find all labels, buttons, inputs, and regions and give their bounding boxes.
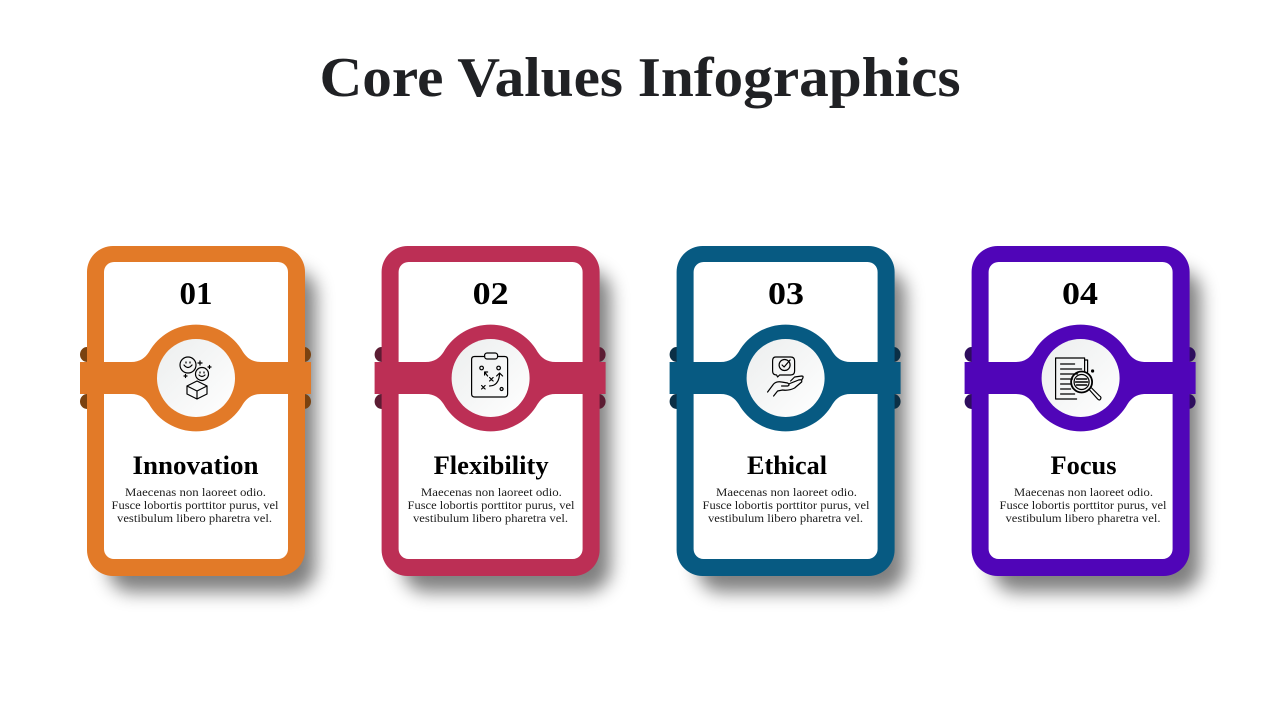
band tabs (80, 347, 311, 409)
band tabs (965, 347, 1196, 409)
description (1000, 487, 1166, 525)
card interior (985, 258, 1177, 563)
description: vestibulum libero pharetra vel. (413, 513, 568, 525)
medallion disc (747, 339, 825, 417)
band tabs (670, 347, 901, 409)
card shadow (108, 270, 316, 592)
heading: Ethical (747, 451, 827, 480)
number: 01 (180, 275, 212, 311)
icon: strategy clipboard (472, 353, 508, 397)
card interior (690, 258, 882, 563)
number: 02 (473, 275, 509, 311)
description: Fusce lobortis porttitor purus, vel (408, 500, 574, 512)
panel: Ethical (670, 246, 906, 592)
icon: hand holding check bubble (768, 357, 803, 396)
description: Maecenas non laoreet odio. (421, 487, 562, 499)
description: Maecenas non laoreet odio. (1014, 487, 1153, 499)
medallion disc (452, 339, 530, 417)
card shadow (698, 270, 906, 592)
card interior (100, 258, 292, 563)
description: Fusce lobortis porttitor purus, vel (999, 500, 1166, 512)
description: vestibulum libero pharetra vel. (1005, 513, 1161, 525)
panel: Innovation (80, 246, 316, 592)
description: vestibulum libero pharetra vel. (117, 513, 272, 525)
heading: Flexibility (434, 451, 549, 480)
number: 03 (768, 275, 804, 311)
number: 04 (1062, 275, 1098, 311)
card interior (395, 258, 587, 563)
band with medallion ring (965, 325, 1196, 431)
card frame (382, 246, 600, 576)
panel: Focus (965, 246, 1201, 592)
band with medallion ring (670, 325, 901, 431)
description: vestibulum libero pharetra vel. (708, 513, 863, 525)
description: Maecenas non laoreet odio. (716, 487, 857, 499)
band with medallion ring (80, 325, 311, 431)
description: Maecenas non laoreet odio. (125, 487, 266, 499)
description (408, 487, 574, 525)
panel: Flexibility (375, 246, 611, 592)
description: Fusce lobortis porttitor purus, vel (112, 500, 278, 512)
card frame (677, 246, 895, 576)
card frame (972, 246, 1190, 576)
icon: smiling faces rising from a box (180, 357, 211, 399)
medallion disc (1042, 339, 1120, 417)
medallion disc (157, 339, 235, 417)
card shadow (403, 270, 611, 592)
band with medallion ring (375, 325, 606, 431)
heading: Focus (1050, 451, 1116, 480)
icon: document with magnifier (1056, 358, 1101, 400)
title: Core Values Infographics (320, 47, 961, 109)
heading: Innovation (132, 451, 259, 480)
description: Fusce lobortis porttitor purus, vel (702, 500, 869, 512)
description (702, 487, 870, 525)
band tabs (375, 347, 606, 409)
card shadow (993, 270, 1201, 592)
card frame (87, 246, 305, 576)
description (112, 487, 278, 525)
